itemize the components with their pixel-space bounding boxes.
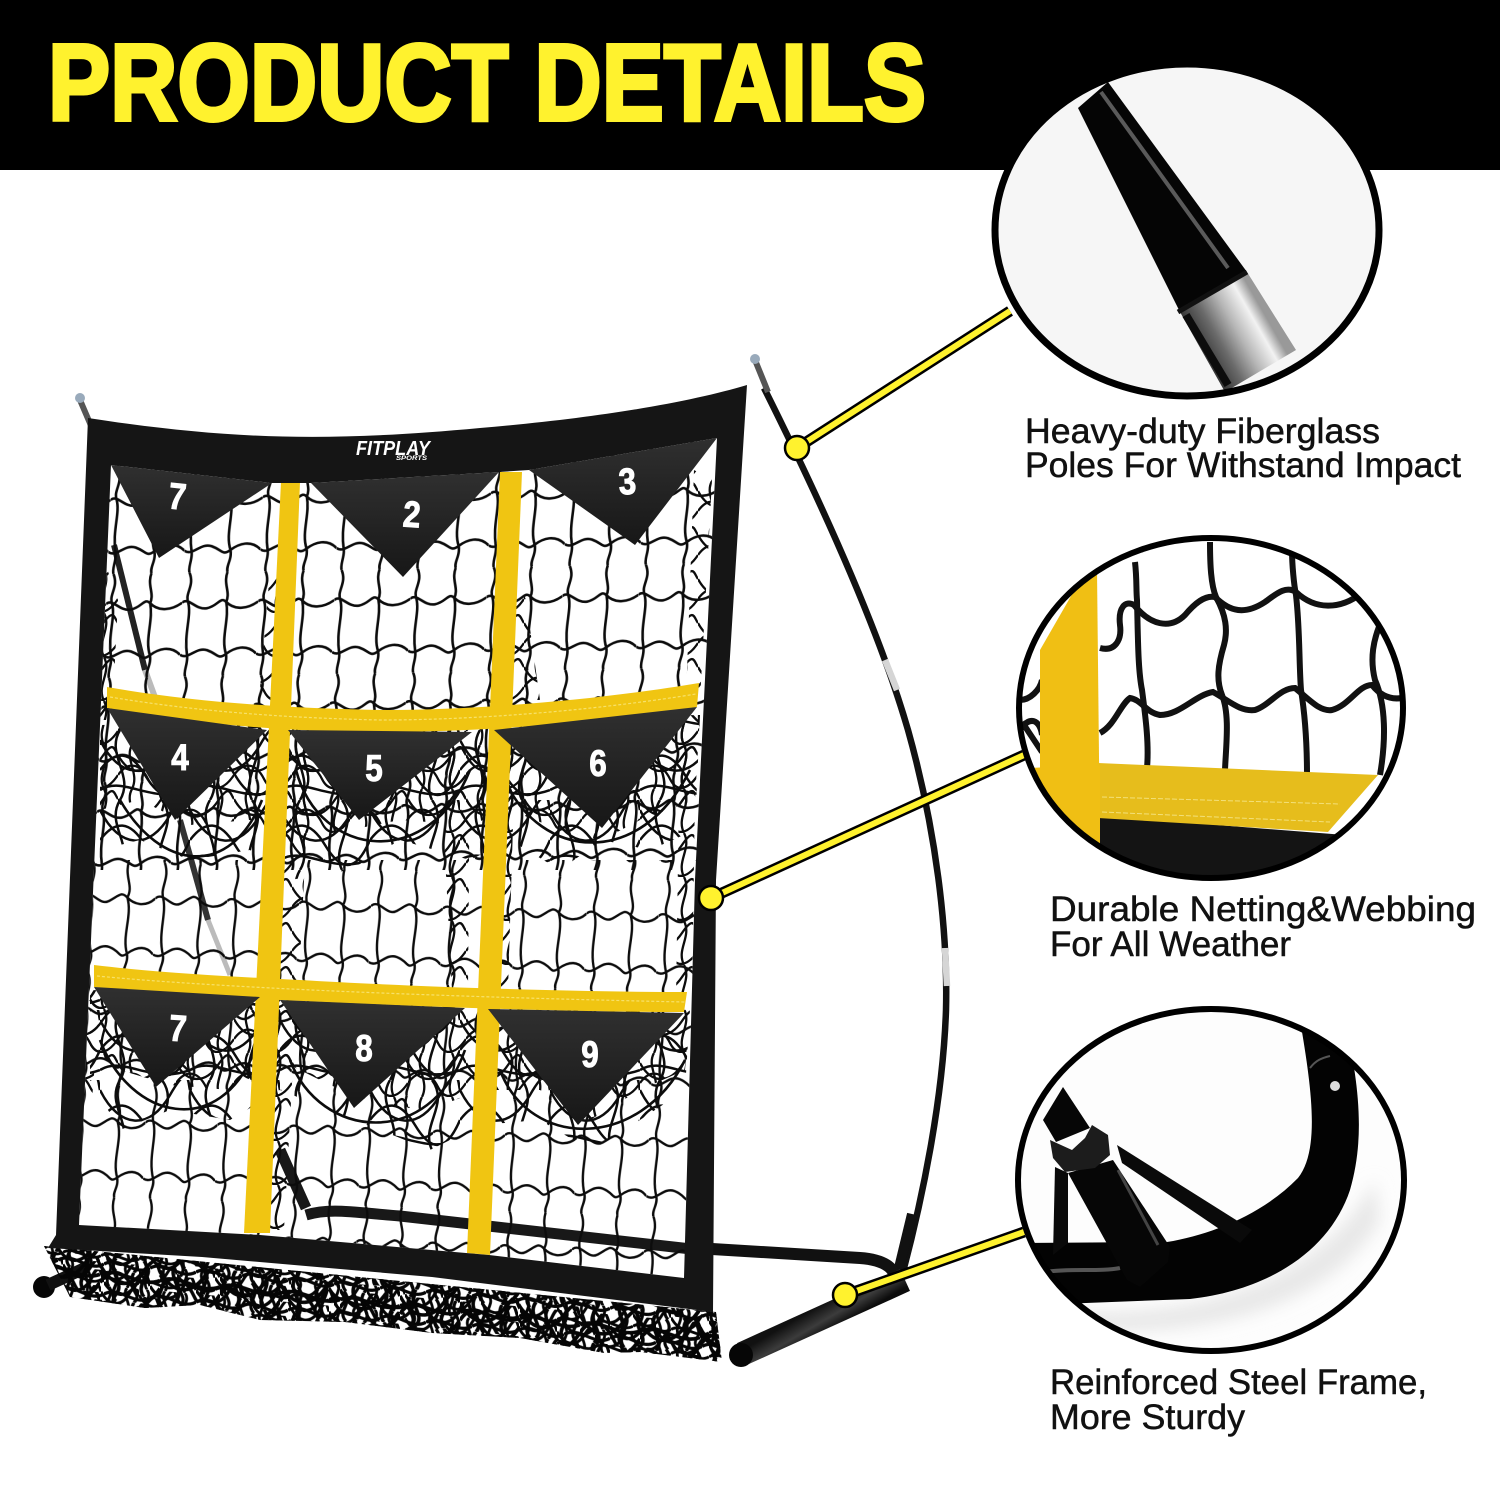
detail circle: netting and webbing: [1019, 538, 1403, 900]
target 6: [494, 707, 697, 828]
target 9: 9: [581, 1035, 599, 1076]
pole sleeve: [898, 1214, 912, 1272]
strap right: [467, 472, 522, 1255]
shadow: [1090, 1192, 1381, 1334]
rear base behind net: [280, 1150, 700, 1250]
pennant targets: [94, 438, 717, 1125]
lower tube: [1068, 1160, 1167, 1267]
left net knot: [1022, 679, 1040, 754]
end cap left: [33, 1276, 55, 1298]
peg top right: [750, 354, 768, 392]
net close-up: [1100, 542, 1402, 775]
collar: [1050, 1125, 1110, 1172]
denser net row three: [90, 990, 690, 1120]
rear pole behind net: [114, 545, 145, 670]
target 7 top: [111, 465, 272, 558]
peg top left: [75, 393, 92, 428]
caption: frame: Reinforced Steel Frame,: [1050, 1363, 1427, 1402]
tube highlight: [1045, 1268, 1120, 1272]
stitching: [97, 694, 696, 1002]
rear pole lower: [180, 820, 208, 920]
title: PRODUCT DETAILS: [48, 22, 926, 144]
dense net row two: [100, 715, 700, 880]
detail circle: steel frame: [1018, 1009, 1404, 1351]
target 2: 2: [402, 494, 422, 536]
header banner: [0, 0, 1500, 170]
lower net: [70, 860, 710, 1280]
denser net row two: [100, 715, 700, 840]
callout line: frame: [833, 1232, 1024, 1307]
upper tube: [1043, 1087, 1090, 1142]
frame border webbing: [48, 385, 747, 1312]
caption: netting: Durable Netting&Webbing: [1050, 890, 1476, 929]
base bar: [712, 1249, 894, 1284]
left foot tube: [48, 1268, 85, 1285]
caption: poles: [1025, 412, 1461, 485]
silver on rear pole: [208, 920, 230, 975]
pole highlight: [1101, 92, 1228, 268]
horizontal yellow webbing: [1098, 763, 1378, 832]
sagging net arcs: [100, 770, 690, 1129]
silver upper joint: [145, 670, 156, 700]
silver joints: [885, 660, 947, 986]
tube sleeve line: [1310, 1056, 1330, 1068]
tube highlight diagonal: [1118, 1170, 1158, 1245]
metal sleeve: [1180, 272, 1296, 392]
target 8: [280, 1000, 465, 1108]
target 4: 4: [171, 738, 189, 779]
U-shaped tube: [1020, 1020, 1359, 1304]
brand logo: SPORTS: [396, 455, 428, 462]
dense net row three: [90, 990, 690, 1150]
vertical straps: [244, 472, 522, 1255]
caption: netting: [1050, 890, 1476, 964]
target 5: 5: [365, 749, 383, 790]
target 7 bottom: 7: [168, 1008, 188, 1050]
bottom net skirt: [44, 1246, 722, 1362]
front base tube: [742, 1280, 905, 1354]
target 2: [311, 472, 499, 577]
upper net: [80, 440, 720, 870]
horizontal straps: [94, 683, 699, 1012]
black fabric: [1100, 818, 1335, 875]
caption: frame: More Sturdy: [1050, 1398, 1246, 1437]
left strut: [1053, 1167, 1068, 1243]
target 4: [107, 708, 267, 820]
strap row three: [94, 965, 687, 1012]
black pole: [1078, 82, 1247, 312]
target 3: [529, 438, 717, 545]
target 8: 8: [355, 1029, 373, 1070]
target 7 top: 7: [166, 476, 188, 518]
target 5: [288, 730, 472, 820]
brand logo: FITPLAY: [356, 438, 431, 460]
target 7 bottom: [94, 987, 260, 1087]
caption: poles: Poles For Withstand Impact: [1025, 446, 1461, 485]
bolt: [1330, 1081, 1340, 1091]
caption: frame: [1050, 1363, 1427, 1437]
callout line: netting: [699, 755, 1024, 910]
product: rear pole and base frame: [33, 354, 947, 1367]
callout line: poles: [785, 311, 1010, 460]
netting: [70, 440, 720, 1280]
curved rear pole: [764, 388, 946, 1272]
caption: netting: For All Weather: [1050, 925, 1291, 964]
strap left: [244, 482, 300, 1233]
strap row two: [107, 683, 699, 732]
target 3: 3: [618, 461, 637, 503]
detail circle: fiberglass pole: [995, 64, 1379, 396]
target 9: [488, 1009, 684, 1125]
gathered net folds: [84, 470, 712, 1230]
right strut: [1117, 1145, 1237, 1228]
end cap right: [729, 1343, 753, 1367]
vertical yellow webbing: [1040, 574, 1100, 768]
caption: poles: Heavy-duty Fiberglass: [1025, 412, 1380, 451]
target 6: 6: [589, 744, 607, 785]
